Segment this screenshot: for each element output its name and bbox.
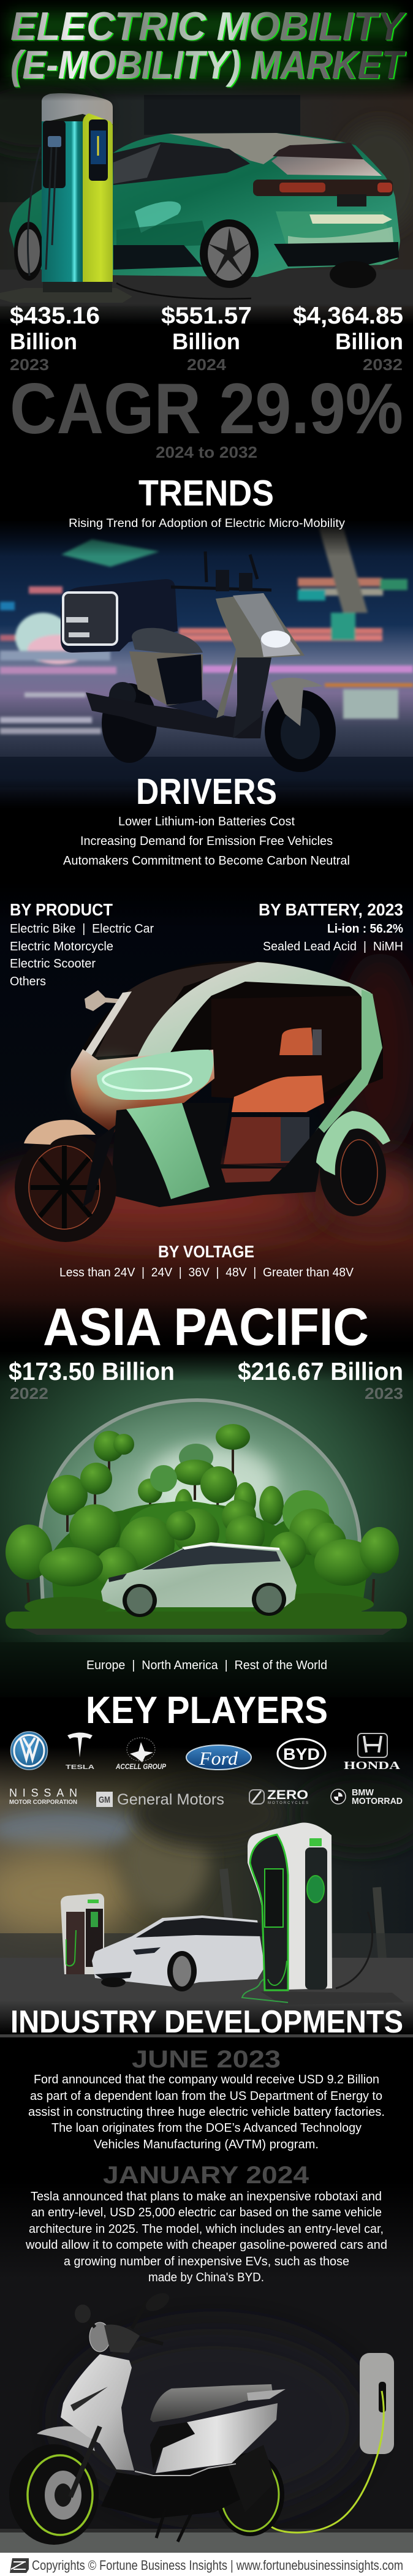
front fender <box>271 678 323 726</box>
footer logo <box>10 2558 29 2573</box>
drivers list: Increasing Demand for Emission Free Vehicles <box>80 835 333 848</box>
photo backdrop <box>0 77 413 325</box>
photo fade bottom <box>0 778 413 809</box>
leg shield <box>216 593 305 718</box>
rear wheel <box>320 1128 386 1216</box>
hero photo: car at charging station <box>0 77 413 325</box>
development: January 2024: made by China's BYD. <box>148 2271 264 2284</box>
under-seat panel <box>129 651 203 706</box>
stat 2024 <box>161 303 252 374</box>
lower body <box>101 2464 245 2518</box>
development: January 2024 <box>25 2162 387 2284</box>
title line 1: ELECTRIC MOBILITY <box>10 4 407 48</box>
development: June 2023: as part of a dependent loan from the US Department of Energy to <box>30 2089 382 2103</box>
moss platform <box>18 1627 395 1635</box>
logo: ford <box>186 1745 251 1770</box>
fade into black <box>0 303 413 325</box>
headrest and seat <box>279 1028 314 1055</box>
wheel: front <box>14 222 44 281</box>
logo: zero motorcycles: ZERO <box>267 1788 308 1802</box>
by product: Electric Scooter <box>10 957 96 971</box>
development: June 2023: assist in constructing three huge electric vehicle battery factories. <box>28 2105 385 2119</box>
handlebars and mirrors <box>171 551 271 590</box>
headlight <box>89 2322 110 2352</box>
storage box <box>61 579 178 653</box>
handlebar and mirrors <box>86 2301 163 2344</box>
title <box>9 4 407 87</box>
region stat 2022 <box>9 1357 175 1403</box>
CAGR figure: 2024 to 2032 <box>156 443 257 461</box>
stat 2032: $4,364.85 <box>293 303 403 329</box>
logo: general motors: GM <box>99 1795 110 1805</box>
logo: volkswagen <box>11 1732 48 1770</box>
logo: nissan <box>9 1787 77 1806</box>
drivers list: Automakers Commitment to Become Carbon Neutral <box>63 854 350 868</box>
by product <box>10 900 154 988</box>
rear wheel <box>216 2453 284 2536</box>
scooter <box>61 551 336 772</box>
development: June 2023: JUNE 2023 <box>132 2046 281 2073</box>
development: January 2024: a growing number of inexpensive EVs, such as those <box>64 2255 349 2268</box>
charging station <box>0 93 251 303</box>
wall charger <box>360 2353 394 2454</box>
dusk backdrop <box>0 1746 413 2034</box>
floorboard <box>165 700 225 718</box>
by product: Others <box>10 975 46 988</box>
right pillar <box>314 990 382 1134</box>
development: January 2024: an entry-level, USD 25,000 electric car based on the same vehicle <box>31 2206 382 2219</box>
logo: accell group: ACCELL GROUP <box>115 1762 167 1771</box>
scooter <box>9 2289 286 2545</box>
logo: byd <box>278 1739 325 1768</box>
wheel: rear <box>200 219 259 288</box>
region stat 2023: 2023 <box>365 1384 403 1403</box>
front fender <box>24 1119 96 1145</box>
bottom photo: scooter charging at wall <box>0 2181 413 2553</box>
by voltage <box>59 1242 354 1279</box>
title glow <box>9 12 401 81</box>
key players heading: KEY PLAYERS <box>86 1689 328 1732</box>
logo: nissan: NISSAN <box>9 1787 77 1799</box>
by voltage: Less than 24V | 24V | 36V | 48V | Greater than 48V <box>59 1266 354 1279</box>
seat <box>132 628 203 654</box>
region heading: ASIA PACIFIC <box>43 1298 369 1357</box>
stat 2023: Billion <box>10 329 77 354</box>
by voltage: BY VOLTAGE <box>158 1242 254 1261</box>
glass dome <box>40 1400 360 1605</box>
front wheel <box>15 1133 116 1242</box>
by battery: Sealed Lead Acid | NiMH <box>263 940 403 953</box>
logo: tesla: TESLA <box>66 1764 94 1771</box>
by product: Electric Motorcycle <box>10 940 113 953</box>
large charger <box>242 1823 404 2005</box>
development: January 2024: would allow it to compete with cheaper gasoline-powered cars and <box>25 2238 387 2252</box>
street backdrop <box>0 521 413 809</box>
region stat 2022: $173.50 Billion <box>9 1357 175 1385</box>
trends heading: TRENDS <box>138 473 274 513</box>
footer band <box>0 2553 413 2576</box>
trends photo: delivery scooter on neon street <box>0 520 413 809</box>
car body <box>9 133 400 277</box>
stat 2023: $435.16 <box>10 303 100 329</box>
logo: zero motorcycles: MOTORCYCLES <box>268 1801 308 1805</box>
development: January 2024: JANUARY 2024 <box>103 2162 309 2189</box>
seat base <box>224 1117 308 1164</box>
wheel: rear right <box>330 261 376 288</box>
kickstand <box>156 2509 193 2542</box>
body frame <box>110 1103 325 1207</box>
by product: BY PRODUCT <box>10 900 113 919</box>
rear fender <box>316 1111 390 1175</box>
region stat 2023: $216.67 Billion <box>238 1357 403 1385</box>
development: June 2023: The loan originates from the DOE’s Advanced Technology <box>51 2121 362 2135</box>
seat <box>150 2384 273 2422</box>
small charger <box>61 1893 104 1974</box>
drivers list <box>63 815 350 868</box>
tricycle photo <box>0 882 413 1345</box>
development: January 2024: Tesla announced that plans to make an inexpensive robotaxi and <box>31 2190 382 2203</box>
drivers list: Lower Lithium-ion Batteries Cost <box>118 815 295 828</box>
logo: bmw motorrad: BMW <box>352 1787 374 1798</box>
leg shield <box>61 2354 134 2471</box>
green backdrop <box>0 1351 413 1694</box>
by product: Electric Bike | Electric Car <box>10 922 154 936</box>
trends text: Rising Trend for Adoption of Electric Micro-Mobility <box>69 517 346 530</box>
photo fade top <box>0 520 413 556</box>
eco car photo <box>0 1351 413 1697</box>
fork <box>70 2426 100 2497</box>
front fender <box>37 2426 95 2451</box>
region stat 2023 <box>238 1357 403 1403</box>
chassis <box>86 692 263 738</box>
rear wheel <box>102 683 157 763</box>
by battery <box>259 900 403 953</box>
logo: honda <box>344 1733 400 1771</box>
charging photo <box>0 1746 413 2037</box>
footer <box>0 2553 413 2576</box>
charging cable <box>263 2391 384 2532</box>
logo: ford: Ford <box>199 1748 238 1769</box>
photo fade bottom <box>0 1636 413 1697</box>
development: June 2023: Ford announced that the company would receive USD 9.2 Billion <box>34 2073 379 2086</box>
front wheel <box>9 2444 99 2545</box>
by battery: Li-ion : 56.2% <box>327 922 403 936</box>
development: June 2023 <box>28 2046 385 2151</box>
logo: bmw motorrad <box>331 1787 403 1806</box>
logo: zero motorcycles <box>249 1788 308 1805</box>
stat 2024: Billion <box>172 329 240 354</box>
stat 2032: Billion <box>335 329 403 354</box>
studio backdrop <box>0 882 413 1342</box>
stat 2024: 2024 <box>187 355 227 374</box>
dark wall <box>0 2181 413 2531</box>
stat 2023: 2023 <box>10 355 49 374</box>
nose with headlight <box>71 1049 214 1134</box>
logo: bmw motorrad: MOTORRAD <box>352 1796 403 1806</box>
drivers heading: DRIVERS <box>136 771 277 812</box>
trees <box>6 1424 399 1618</box>
logo: honda: HONDA <box>344 1759 400 1771</box>
tricycle <box>15 961 390 1242</box>
other regions: Europe | North America | Rest of the World <box>86 1659 327 1672</box>
development: January 2024: architecture in 2025. The model, which includes an entry-level car, <box>29 2222 384 2236</box>
development: June 2023: Vehicles Manufacturing (AVTM) program. <box>94 2138 319 2151</box>
logo: accell group <box>115 1738 167 1771</box>
white car <box>92 1915 265 1991</box>
stat 2023 <box>10 303 100 374</box>
by battery: BY BATTERY, 2023 <box>259 900 403 919</box>
logo: byd: BYD <box>283 1745 320 1763</box>
logo: tesla <box>66 1733 94 1771</box>
stat 2024: $551.57 <box>161 303 252 329</box>
eco car <box>101 1542 297 1617</box>
front wheel <box>265 690 336 772</box>
floor trim <box>135 2464 236 2476</box>
stat 2032: 2032 <box>363 355 403 374</box>
front pillar <box>136 962 380 1060</box>
logo: nissan: MOTOR CORPORATION <box>9 1799 77 1806</box>
forest hill <box>50 1502 368 1618</box>
mirror <box>85 990 129 1011</box>
floor <box>0 2529 413 2553</box>
mint side panel <box>126 1103 210 1199</box>
market size figures <box>10 303 403 374</box>
stat 2032 <box>293 303 403 374</box>
canopy <box>80 961 383 1103</box>
rear panel <box>156 2403 278 2473</box>
logo: general motors: General Motors <box>117 1791 224 1808</box>
region stat 2022: 2022 <box>10 1384 48 1403</box>
logos <box>9 1732 403 1808</box>
